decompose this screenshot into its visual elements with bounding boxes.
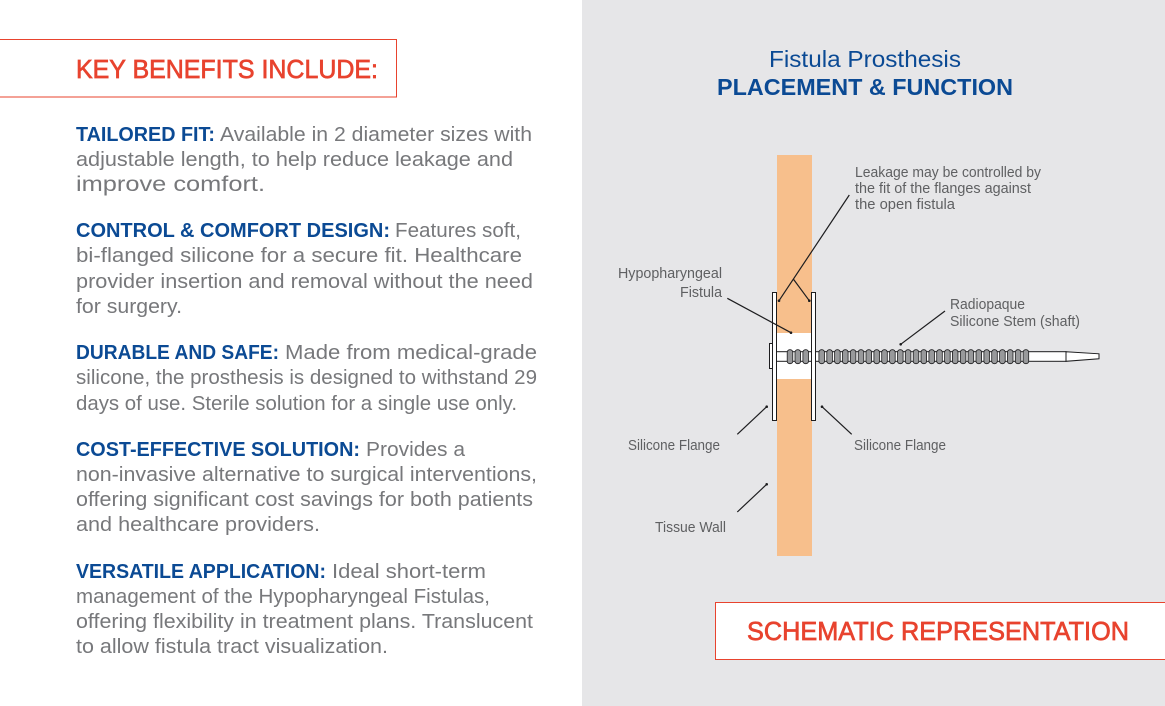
- text block: durable and safe: Made from medical-grade: [285, 342, 537, 364]
- text block: durable and safe: DURABLE AND SAFE:: [76, 342, 279, 364]
- callout: left silicone flange: Silicone Flange: [628, 437, 720, 454]
- callout: left silicone flange: [628, 405, 768, 454]
- text block: control and comfort design: Features soft,: [395, 220, 521, 242]
- stem shaft: [776, 352, 1066, 361]
- text block: tailored fit: TAILORED FIT:: [76, 124, 215, 146]
- heading: key benefits include: KEY BENEFITS INCLUDE:: [76, 54, 378, 84]
- text block: cost-effective solution: [76, 439, 537, 536]
- heading: key benefits include: [0, 40, 396, 97]
- text block: cost-effective solution: Provides a: [366, 439, 466, 461]
- heading: schematic representation: SCHEMATIC REPRESENTATION: [747, 616, 1129, 646]
- callout: leakage control: the fit of the flanges against: [855, 180, 1032, 197]
- callout: tissue wall: [655, 483, 768, 536]
- text block: tailored fit: [76, 124, 532, 196]
- text block: control and comfort design: for surgery.: [76, 296, 182, 318]
- callout: leakage control: Leakage may be controlled by: [855, 164, 1041, 181]
- stem ribs: [787, 350, 1029, 364]
- text block: control and comfort design: bi-flanged silicone for a secure fit. Healthcare: [76, 245, 522, 267]
- diagram: tissue wall: [777, 155, 812, 556]
- callout: radiopaque silicone stem: [899, 296, 1080, 346]
- heading: schematic representation: [716, 602, 1165, 660]
- callout: hypopharyngeal fistula: [618, 265, 792, 334]
- text block: versatile application: to allow fistula tract visualization.: [76, 636, 388, 658]
- stem end button: [770, 344, 772, 368]
- text block: tailored fit: adjustable length, to help reduce leakage and: [76, 149, 513, 171]
- text block: control and comfort design: CONTROL & COMFORT DESIGN:: [76, 220, 390, 242]
- text block: tailored fit: Available in 2 diameter sizes with: [220, 124, 532, 146]
- text block: versatile application: Ideal short-term: [332, 561, 486, 583]
- text block: control and comfort design: [76, 220, 533, 318]
- text block: durable and safe: days of use. Sterile solution for a single use only.: [76, 393, 517, 415]
- text block: cost-effective solution: and healthcare providers.: [76, 514, 320, 536]
- panel: key benefits: [0, 40, 537, 658]
- text block: versatile application: VERSATILE APPLICATION:: [76, 561, 326, 583]
- title: fistula prosthesis placement and function: Fistula Prosthesis: [769, 46, 961, 72]
- title: fistula prosthesis placement and function: PLACEMENT & FUNCTION: [717, 74, 1013, 100]
- callout: hypopharyngeal fistula: Fistula: [680, 284, 723, 301]
- callout: right silicone flange: [821, 405, 946, 454]
- text block: versatile application: management of the Hypopharyngeal Fistulas,: [76, 586, 490, 608]
- right flange: [812, 292, 816, 420]
- text block: versatile application: [76, 561, 533, 658]
- callout: leakage control: [778, 164, 1041, 302]
- text block: tailored fit: improve comfort.: [76, 173, 265, 196]
- text block: cost-effective solution: non-invasive alternative to surgical interventions,: [76, 464, 537, 486]
- stem tip: [1066, 352, 1099, 361]
- callout: leakage control: the open fistula: [855, 196, 956, 213]
- title: fistula prosthesis placement and function: [717, 46, 1013, 100]
- text block: control and comfort design: provider insertion and removal without the need: [76, 271, 533, 293]
- diagram: prosthesis: [770, 292, 1099, 420]
- text block: cost-effective solution: COST-EFFECTIVE SOLUTION:: [76, 439, 360, 461]
- callout: radiopaque silicone stem: Silicone Stem (shaft): [950, 313, 1080, 330]
- text block: versatile application: offering flexibility in treatment plans. Translucent: [76, 611, 533, 633]
- panel: schematic: [582, 0, 1165, 706]
- callout: tissue wall: Tissue Wall: [655, 519, 726, 536]
- text block: durable and safe: silicone, the prosthesis is designed to withstand 29: [76, 367, 537, 389]
- left flange: [772, 292, 776, 420]
- callout: hypopharyngeal fistula: Hypopharyngeal: [618, 265, 722, 282]
- callout: radiopaque silicone stem: Radiopaque: [950, 296, 1025, 313]
- text block: durable and safe: [76, 342, 537, 415]
- text block: cost-effective solution: offering significant cost savings for both patients: [76, 489, 533, 511]
- callout: right silicone flange: Silicone Flange: [854, 437, 946, 454]
